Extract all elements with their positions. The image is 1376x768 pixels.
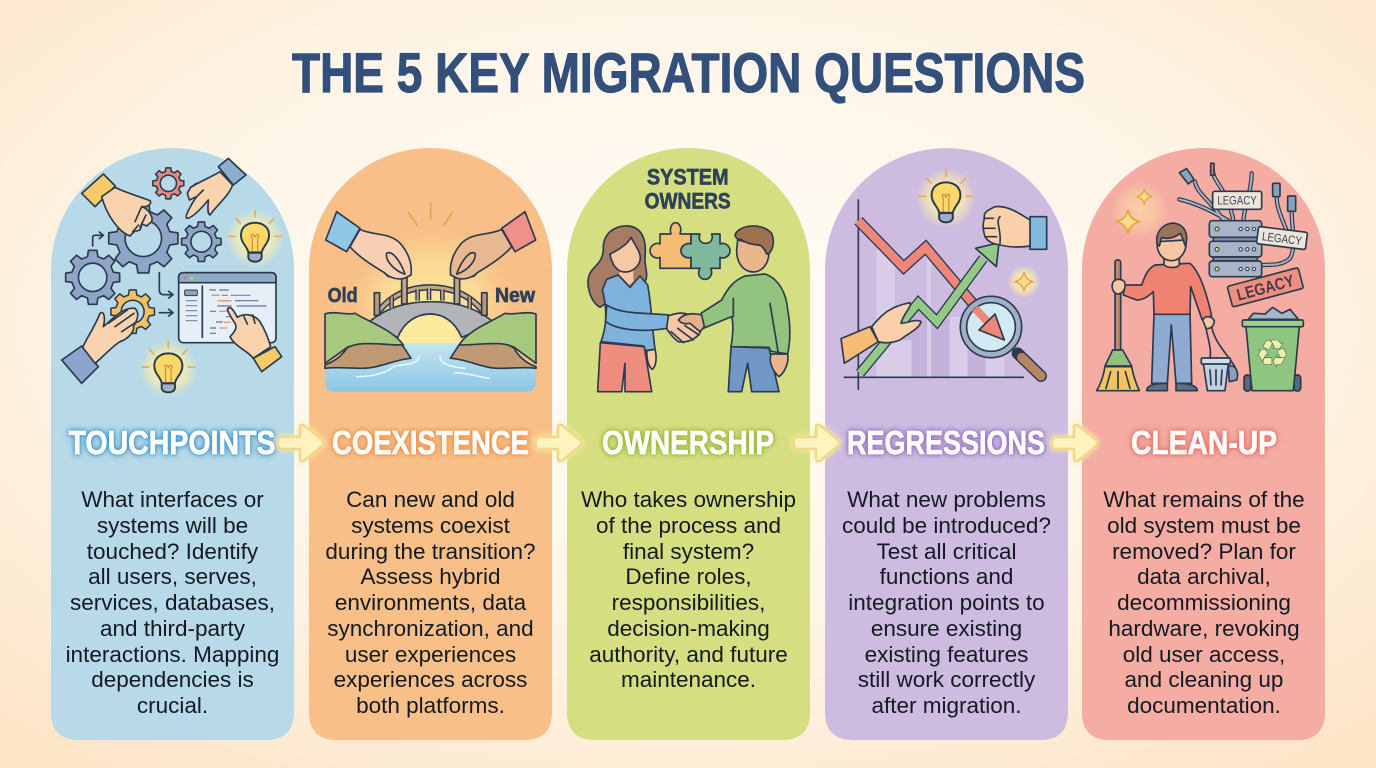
bridge <box>367 276 495 337</box>
icon: right hand <box>450 212 536 279</box>
icon: recycling bin: ♻ <box>1256 332 1289 376</box>
text block: Who takes ownership <box>581 487 796 512</box>
sun glow <box>348 227 514 393</box>
illustration: system owners shaking hands <box>588 164 790 392</box>
text block: removed? Plan for <box>1112 539 1296 564</box>
icon: bottom-left hand <box>62 308 138 383</box>
icon: lower hand <box>841 303 921 363</box>
icon: top-right hand <box>186 158 246 218</box>
arrow: touchpoints to coexistence <box>278 425 324 461</box>
icon: code window <box>179 273 276 343</box>
text block: What remains of the <box>1103 487 1305 512</box>
text block: both platforms. <box>356 693 505 718</box>
left bank <box>325 313 411 368</box>
text block: decision-making <box>607 616 770 641</box>
text block: data archival, <box>1137 564 1271 589</box>
text block: Test all critical <box>876 539 1017 564</box>
text block: hardware, revoking <box>1108 616 1300 641</box>
icon: left hand <box>326 212 411 279</box>
icon: magnifying glass <box>960 296 1041 376</box>
text block: old user access, <box>1123 642 1285 667</box>
icon: light bulb right <box>226 209 284 268</box>
label: system owners: OWNERS <box>645 188 731 213</box>
text block: still work correctly <box>858 667 1036 692</box>
icon: recycling bin <box>1242 307 1303 391</box>
text block: old system must be <box>1107 513 1301 538</box>
icon: man <box>701 226 790 392</box>
text block: could be introduced? <box>842 513 1051 538</box>
text block: user experiences <box>345 642 516 667</box>
text block: functions and <box>880 564 1013 589</box>
title: THE 5 KEY MIGRATION QUESTIONS <box>292 41 1085 104</box>
text block: services, databases, <box>70 590 275 615</box>
text block: maintenance. <box>621 667 756 692</box>
panel: clean-up <box>1082 148 1325 740</box>
text block: What interfaces or <box>81 487 264 512</box>
heading: CLEAN-UP <box>1131 424 1277 461</box>
chart bars <box>877 248 1004 377</box>
label: Old: Old <box>328 285 358 307</box>
panel: coexistence <box>309 148 552 740</box>
tag: legacy 1 <box>1213 191 1262 209</box>
icon: sparkle <box>1007 265 1041 298</box>
text block: and cleaning up <box>1125 667 1283 692</box>
text block: responsibilities, <box>612 590 765 615</box>
arch sunlight <box>398 313 462 343</box>
tag: legacy 2: LEGACY <box>1261 229 1303 248</box>
text block: touched? Identify <box>87 539 259 564</box>
text block: What new problems <box>847 487 1046 512</box>
text block: decommissioning <box>1117 590 1291 615</box>
text block: final system? <box>623 539 754 564</box>
arrow: regressions to clean-up <box>1052 425 1098 461</box>
label: system owners: SYSTEM <box>647 164 728 189</box>
text block: and third-party <box>100 616 246 641</box>
heading: REGRESSIONS <box>847 424 1045 461</box>
text block: crucial. <box>137 693 208 718</box>
text block: interactions. Mapping <box>66 642 279 667</box>
icon: server rack <box>1209 221 1262 277</box>
icon: broom <box>1097 260 1139 391</box>
icon: light bulb bottom <box>139 340 198 398</box>
illustration: regressions chart <box>841 168 1047 389</box>
icon: handshake <box>667 313 704 343</box>
arrow: coexistence to ownership <box>536 425 582 461</box>
icon: woman <box>588 226 669 392</box>
tag: legacy 3: LEGACY <box>1235 271 1296 305</box>
text block: existing features <box>865 642 1028 667</box>
icon: flow arrows <box>93 232 173 316</box>
right bank <box>450 313 536 368</box>
label: New: New <box>495 285 535 307</box>
text block: documentation. <box>1127 693 1281 718</box>
text block: Can new and old <box>346 487 515 512</box>
icon: small trash can <box>1201 327 1237 391</box>
panel: regressions <box>825 148 1068 740</box>
text block: Define roles, <box>625 564 752 589</box>
text block: integration points to <box>848 590 1045 615</box>
illustration: bridge between old and new <box>325 203 536 393</box>
text block: synchronization, and <box>327 616 534 641</box>
heading: OWNERSHIP <box>602 424 774 461</box>
text block: environments, data <box>335 590 527 615</box>
water ripples <box>357 356 489 378</box>
panel: ownership <box>567 148 810 740</box>
icon: top-left hand <box>82 174 152 236</box>
icon: bottom-right hand <box>227 308 282 372</box>
panel: touchpoints <box>51 148 294 740</box>
text block: after migration. <box>871 693 1022 718</box>
illustration: cleaning up legacy systems <box>1097 163 1308 391</box>
icon: gears <box>66 168 221 333</box>
text block: all users, serves, <box>88 564 257 589</box>
heading: TOUCHPOINTS <box>68 424 276 461</box>
arrow: ownership to regressions <box>794 425 840 461</box>
text block: systems coexist <box>351 513 511 538</box>
icon: man <box>1112 223 1214 391</box>
illustration: gears, hands and code window <box>62 158 284 398</box>
text block: ensure existing <box>871 616 1022 641</box>
text block: experiences across <box>334 667 527 692</box>
text block: dependencies is <box>91 667 254 692</box>
river <box>325 343 536 392</box>
text block: systems will be <box>97 513 248 538</box>
icon: sparkles <box>1112 182 1168 238</box>
chart axes <box>844 200 1023 389</box>
icon: cables <box>1179 163 1296 265</box>
sun rays <box>409 203 453 225</box>
icon: upper hand <box>983 206 1047 249</box>
red falling trend line <box>858 221 973 304</box>
green rising trend line <box>860 243 999 373</box>
icon: light bulb <box>916 168 976 228</box>
label: system owners <box>645 164 731 213</box>
icon: puzzle pieces <box>650 223 730 279</box>
text block: of the process and <box>596 513 781 538</box>
tag: legacy 1: LEGACY <box>1217 194 1257 208</box>
text block: during the transition? <box>325 539 536 564</box>
text block: Assess hybrid <box>360 564 501 589</box>
heading: COEXISTENCE <box>332 424 529 461</box>
text block: authority, and future <box>589 642 788 667</box>
